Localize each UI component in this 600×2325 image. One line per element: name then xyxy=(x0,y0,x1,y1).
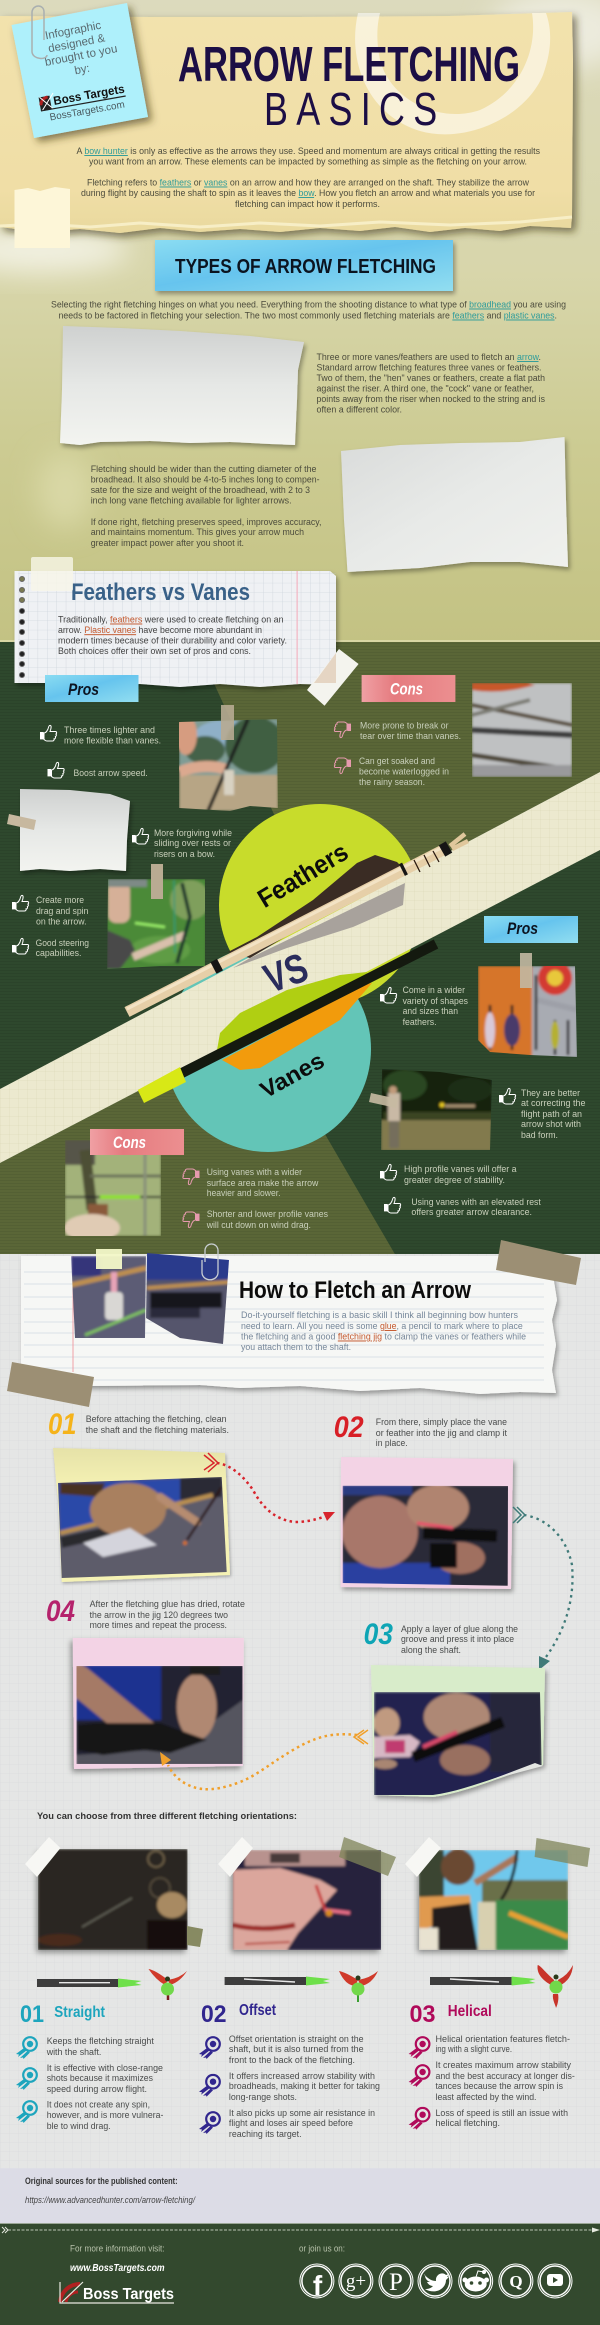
label: cons vanes xyxy=(90,1129,184,1155)
step 03: Apply a layer of glue along the xyxy=(401,1624,518,1635)
photo: fletching jig xyxy=(145,1252,231,1346)
card: step two photo xyxy=(341,1457,513,1589)
text: intro: fletching can impact how it performs. xyxy=(235,199,380,210)
column: offset: 02 xyxy=(201,2001,226,2028)
diagram: straight fletching xyxy=(37,1969,187,2000)
photo: colorful arrows and target xyxy=(478,961,578,1058)
notebook text: Traditionally, feathers were used to create fletching on an xyxy=(58,614,284,626)
bullets: vanes cons: will cut down on wind drag. xyxy=(206,1220,311,1231)
step 04: 04 xyxy=(46,1595,75,1628)
text: fletching should be wider: If done right, fletching preserves speed, improves accuracy, xyxy=(91,517,322,528)
bullets: vanes cons: heavier and slower. xyxy=(207,1188,280,1199)
column: helical: ing with a slight curve. xyxy=(436,2044,512,2055)
panel: header paper xyxy=(0,12,573,233)
text: three or more vanes xyxy=(316,352,545,416)
bullet: high profile vanes xyxy=(380,1164,517,1186)
label: pros vanes xyxy=(484,916,578,943)
text: how to fletch intro: need to learn. All you need is some glue, a pencil to mark where to place xyxy=(241,1321,523,1332)
column: straight: Keeps the fletching straight xyxy=(47,2036,154,2047)
text: three or more vanes: against the riser. A third one, the "cock" vane or feather, xyxy=(316,384,534,394)
bullet: come in a wider variety: and sizes than xyxy=(403,1006,458,1017)
notebook text: arrow. Plastic vanes have become more abundant in xyxy=(58,625,262,636)
notebook text xyxy=(58,614,287,657)
footer visit xyxy=(70,2244,165,2274)
step 02 xyxy=(334,1411,507,1449)
column: helical: 03 xyxy=(410,2001,436,2028)
bullet: elevated rest xyxy=(384,1197,541,1218)
column: offset: Offset xyxy=(239,2002,277,2019)
label: cons feathers xyxy=(362,675,455,702)
tape: fletch panel right xyxy=(496,1240,581,1285)
label: versus: VS xyxy=(258,944,314,1002)
photo: archer with tree background xyxy=(179,719,278,811)
text: intro: A bow hunter is only as effective as the arrows they use. Speed and momentum are always critical in getting the results xyxy=(76,146,540,157)
panel: sources: Original sources for the published content: xyxy=(25,2176,178,2187)
tape: on target photo xyxy=(520,953,532,988)
text: intro: you want from an arrow. These elements can be impacted by something as simple as the fletching on your arrow. xyxy=(89,156,527,168)
notebook text: Both choices offer their own set of pros and cons. xyxy=(58,646,251,657)
icon: paperclip xyxy=(32,6,47,58)
bullet: correcting flight path: bad form. xyxy=(521,1130,558,1141)
panel: how to fletch xyxy=(21,1252,557,1394)
footer social: or join us on: xyxy=(299,2244,345,2254)
panel: sources: https://www.advancedhunter.com/arrow-fletching/ xyxy=(25,2195,196,2206)
note text xyxy=(44,20,118,77)
title xyxy=(178,38,520,135)
text: fletching should be wider: greater impact power after you shoot it. xyxy=(91,538,244,549)
bullet: come in a wider variety xyxy=(380,985,468,1028)
tape: notebook corner xyxy=(307,649,359,706)
bullet: come in a wider variety: Come in a wider xyxy=(403,985,466,996)
step 03: along the shaft. xyxy=(401,1645,461,1656)
note text: by: xyxy=(74,63,91,77)
photo: glue and pencil xyxy=(71,1256,147,1340)
card: step four photo xyxy=(73,1638,244,1769)
tape: orientation offset xyxy=(218,1837,396,1877)
label: cons vanes: Cons xyxy=(113,1133,146,1152)
column: straight: 01 xyxy=(20,2001,44,2028)
column: offset: long-range shots. xyxy=(229,2092,297,2103)
label: feathers: Feathers xyxy=(252,836,353,914)
card: step one photo xyxy=(53,1448,231,1582)
text: fletching should be wider: inch long vane fletching available for lighter arrows. xyxy=(91,496,292,506)
bullets: vanes cons: Using vanes with a wider xyxy=(207,1167,303,1178)
note text: brought to you xyxy=(44,43,118,69)
column: offset: It offers increased arrow stability with xyxy=(229,2071,375,2082)
text: fletching should be wider: and maintains momentum. This gives your arrow much xyxy=(91,527,304,538)
diagram: helical fletching xyxy=(430,1965,573,2008)
step 04: After the fletching glue has dried, rotate xyxy=(90,1599,245,1610)
bullets: feathers pros xyxy=(40,725,161,779)
column: helical xyxy=(409,2001,575,2130)
column: offset: reaching its target. xyxy=(229,2129,302,2140)
text: intro: during flight by causing the shaft to spin as it leaves the bow. How you fletch an arrow and what materials you use for xyxy=(81,188,536,199)
bullet: elevated rest: Using vanes with an elevated rest xyxy=(411,1197,541,1208)
text: three or more vanes: Two of them, the "hen" vanes or feathers, create a flat path xyxy=(316,373,545,384)
text: three or more vanes: Three or more vanes/feathers are used to fletch an arrow. xyxy=(316,352,541,363)
tape: fletch panel top xyxy=(96,1249,122,1269)
column: helical: helical fletching. xyxy=(436,2118,500,2129)
photo: damaged feathers xyxy=(472,683,572,777)
step 02: or feather into the jig and clamp it xyxy=(376,1428,507,1439)
footer social: g+ xyxy=(346,2271,366,2292)
sticky note xyxy=(12,3,148,138)
bullet: more forgiving xyxy=(132,828,232,860)
column: straight: with the shaft. xyxy=(46,2047,101,2058)
title: BASICS xyxy=(264,84,437,135)
bullet: high profile vanes: High profile vanes will offer a xyxy=(404,1164,517,1175)
photo: orientation helical xyxy=(419,1849,569,1950)
background: grid section xyxy=(0,1254,600,2169)
bullets: create more drag: drag and spin xyxy=(36,906,88,917)
bullets: vanes cons: Shorter and lower profile vanes xyxy=(207,1209,328,1220)
panel: blank paper two xyxy=(341,437,568,572)
column: offset: flight and loses air speed before xyxy=(229,2118,353,2129)
bullets: create more drag: Create more xyxy=(36,895,84,906)
arrow: wooden shaft with feathers xyxy=(127,834,468,1012)
dashed arrow xyxy=(2,2227,600,2233)
footer visit: For more information visit: xyxy=(70,2244,165,2254)
panel: footer xyxy=(0,2223,600,2325)
bullet: come in a wider variety: variety of shapes xyxy=(403,996,468,1007)
text: selecting fletching xyxy=(51,300,566,322)
step 03: 03 xyxy=(364,1618,393,1651)
panel: blank paper one xyxy=(60,326,304,445)
bullets: create more drag xyxy=(12,895,89,959)
column: helical: Helical xyxy=(448,2003,492,2020)
column: offset: It also picks up some air resistance in xyxy=(229,2108,375,2119)
column: straight: shots because it maximizes xyxy=(47,2073,153,2084)
text: fletching should be wider xyxy=(91,464,322,549)
bullets: feathers cons: tear over time than vanes. xyxy=(360,731,461,742)
bullets: vanes cons: surface area make the arrow xyxy=(207,1178,318,1189)
step 04: more times and repeat the process. xyxy=(90,1620,227,1631)
notebook rings xyxy=(20,576,24,678)
bullet: correcting flight path: They are better xyxy=(521,1088,581,1099)
column: offset xyxy=(199,2001,380,2140)
tape: on field photo xyxy=(369,1093,398,1108)
text: three or more vanes: often a different color. xyxy=(316,404,402,416)
diagram: offset fletching xyxy=(225,1971,378,2002)
footer social: Q xyxy=(509,2272,523,2291)
text: selecting fletching: needs to be factored in fletching your selection. The two most commonly used fletching materials are feathers and plastic vanes. xyxy=(58,310,557,322)
column: helical: and the best accuracy at longer dis- xyxy=(436,2071,575,2082)
column: offset: broadheads, making it better for taking xyxy=(229,2081,380,2092)
step 04: the arrow in the jig 120 degrees two xyxy=(90,1610,228,1621)
column: offset: front to the back of the fletching. xyxy=(229,2055,355,2066)
tape: on paper three xyxy=(7,814,36,830)
photo: bow sight close up xyxy=(64,1140,161,1242)
photo: orientation offset xyxy=(232,1850,382,1950)
heading: types of arrow fletching: TYPES OF ARROW FLETCHING xyxy=(175,256,436,278)
card: step three photo xyxy=(371,1665,545,1797)
icon: helical vanes xyxy=(537,1965,573,2008)
footer logo xyxy=(60,2282,174,2303)
step 01: Before attaching the fletching, clean xyxy=(86,1414,227,1425)
column: straight: Straight xyxy=(54,2004,106,2021)
footer social: f xyxy=(313,2270,323,2301)
step 02: in place. xyxy=(376,1438,408,1449)
text: how to fletch intro xyxy=(241,1310,526,1353)
column: straight: It does not create any spin, xyxy=(47,2100,150,2110)
background: fabric section with diagonal band xyxy=(0,642,600,1256)
step 01: the shaft and the fletching materials. xyxy=(86,1425,229,1436)
text: fletching should be wider: broadhead. It also should be 4-to-5 inches long to compen- xyxy=(91,474,320,485)
bullet: high profile vanes: greater degree of stability. xyxy=(404,1175,505,1186)
bullet: more forgiving: sliding over rests or xyxy=(154,838,232,849)
step 03 xyxy=(364,1618,518,1656)
bullets: feathers pros: Boost arrow speed. xyxy=(74,768,148,779)
tape: on archer photo xyxy=(221,705,234,740)
column: straight xyxy=(16,2001,163,2132)
text: three or more vanes: points away from the riser when nocked to the string and is xyxy=(316,394,545,405)
column: offset: shaft, but it is also turned from the xyxy=(229,2044,364,2055)
column: helical: tances because the arrow spin is xyxy=(436,2081,563,2092)
column: straight: ble to wind drag. xyxy=(47,2121,111,2132)
bullets: create more drag: Good steering xyxy=(36,938,89,949)
column: straight: It is effective with close-range xyxy=(47,2063,163,2074)
bullet: elevated rest: offers greater arrow clearance. xyxy=(411,1207,532,1218)
notebook heading: Feathers vs Vanes xyxy=(71,579,250,606)
label: vanes: Vanes xyxy=(256,1047,328,1103)
background: tan paper area xyxy=(0,0,600,643)
sticky note: BossTargets.com xyxy=(49,99,126,123)
text: intro xyxy=(76,146,540,210)
step 02: From there, simply place the vane xyxy=(376,1417,507,1428)
arrow: step three to four xyxy=(160,1730,368,1789)
panel: sources xyxy=(0,2168,600,2223)
bullets: feathers cons: the rainy season. xyxy=(359,777,425,788)
step 01 xyxy=(48,1408,229,1441)
text: how to fletch intro: you attach them to the shaft. xyxy=(241,1342,351,1353)
text: selecting fletching: Selecting the right fletching hinges on what you need. Everything from the shooting distance to what type of broadhead you are using xyxy=(51,300,566,310)
tape: orientation straight xyxy=(25,1837,203,1947)
footer social xyxy=(299,2244,572,2301)
bullets: create more drag: on the arrow. xyxy=(36,916,86,928)
bullet: more forgiving: risers on a bow. xyxy=(154,849,215,860)
note text: Infographic xyxy=(44,20,103,42)
note text: designed & xyxy=(47,32,106,55)
bullet: correcting flight path xyxy=(499,1088,586,1141)
label: cons feathers: Cons xyxy=(390,680,423,698)
heading: how to fletch an arrow: How to Fletch an Arrow xyxy=(239,1277,471,1304)
tape: top left xyxy=(14,187,70,248)
notebook text: modern times because of their durability and color variety. xyxy=(58,636,287,646)
bullets: feathers cons: Can get soaked and xyxy=(359,756,435,767)
bullets: feathers pros: Three times lighter and xyxy=(64,725,155,736)
arrow: plastic vane xyxy=(138,944,436,1103)
label: pros feathers: Pros xyxy=(68,680,99,699)
column: helical: Loss of speed is still an issue with xyxy=(436,2108,568,2119)
photo: archer in field xyxy=(381,1069,492,1151)
icon: paperclip fletch xyxy=(202,1244,218,1280)
bullets: feathers pros: more flexible than vanes. xyxy=(64,736,161,746)
column: helical: It creates maximum arrow stability xyxy=(436,2060,571,2071)
heading: types of arrow fletching xyxy=(155,240,453,291)
bullets: feathers cons xyxy=(334,720,461,788)
bullet: more forgiving: More forgiving while xyxy=(154,828,232,839)
icon: offset vanes xyxy=(339,1971,378,2002)
bullet: correcting flight path: arrow shot with xyxy=(521,1119,581,1130)
text: orientations intro: You can choose from three different fletching orientations: xyxy=(37,1811,297,1822)
column: helical: Helical orientation features fletch- xyxy=(436,2034,570,2045)
tape: on bow photo xyxy=(151,864,163,899)
text: intro: Fletching refers to feathers or vanes on an arrow and how they are arranged on the shaft. They stabilize the arrow xyxy=(87,178,529,188)
column: straight: however, and is more vulnera- xyxy=(47,2110,163,2121)
step 01: 01 xyxy=(48,1408,76,1441)
text: how to fletch intro: Do-it-yourself fletching is a basic skill I think all beginning bow hunters xyxy=(241,1310,518,1321)
text: how to fletch intro: the fletching and a good fletching jig to clamp the vanes or feathers while xyxy=(241,1332,526,1342)
step 02: 02 xyxy=(334,1411,364,1444)
column: offset: Offset orientation is straight on the xyxy=(229,2034,364,2045)
photo: man with compound bow xyxy=(107,879,210,971)
tape: notebook top xyxy=(31,557,73,591)
tape: fletch panel left xyxy=(7,1362,94,1407)
step 04 xyxy=(46,1595,245,1631)
bullets: vanes cons xyxy=(183,1167,328,1231)
bullets: create more drag: capabilities. xyxy=(36,948,82,959)
footer logo: Boss Targets xyxy=(83,2286,174,2303)
note logo: Boss Targets xyxy=(52,82,126,108)
bullet: come in a wider variety: feathers. xyxy=(403,1017,437,1028)
label: pros vanes: Pros xyxy=(507,919,538,938)
bullet: correcting flight path: flight path of an xyxy=(521,1109,582,1120)
arrow: step two to three xyxy=(513,1507,573,1670)
bullets: feathers cons: become waterlogged in xyxy=(359,766,449,778)
photo: orientation straight xyxy=(38,1849,188,1950)
panel: blank paper three xyxy=(20,789,130,871)
panel: feathers vs vanes notebook xyxy=(14,571,336,687)
bullet: correcting flight path: at correcting the xyxy=(521,1098,586,1109)
icon: straight vanes xyxy=(148,1969,187,2000)
label: pros feathers xyxy=(45,675,138,702)
step 03: groove and press it into place xyxy=(401,1634,514,1645)
footer social: P xyxy=(389,2269,403,2296)
text: three or more vanes: Standard arrow fletching features three vanes or feathers. xyxy=(316,362,542,374)
text: fletching should be wider: sate for the size and weight of the broadhead, with 2 to 3 xyxy=(91,485,310,496)
footer visit: www.BossTargets.com xyxy=(70,2262,165,2274)
text: fletching should be wider: Fletching should be wider than the cutting diameter of the xyxy=(91,464,316,475)
arrow: step one to two xyxy=(204,1453,335,1522)
tape: orientation helical xyxy=(405,1837,590,1877)
column: helical: least affected by the wind. xyxy=(436,2092,536,2103)
bullets: feathers cons: More prone to break or xyxy=(360,720,449,732)
column: straight: speed during arrow flight. xyxy=(47,2084,147,2095)
